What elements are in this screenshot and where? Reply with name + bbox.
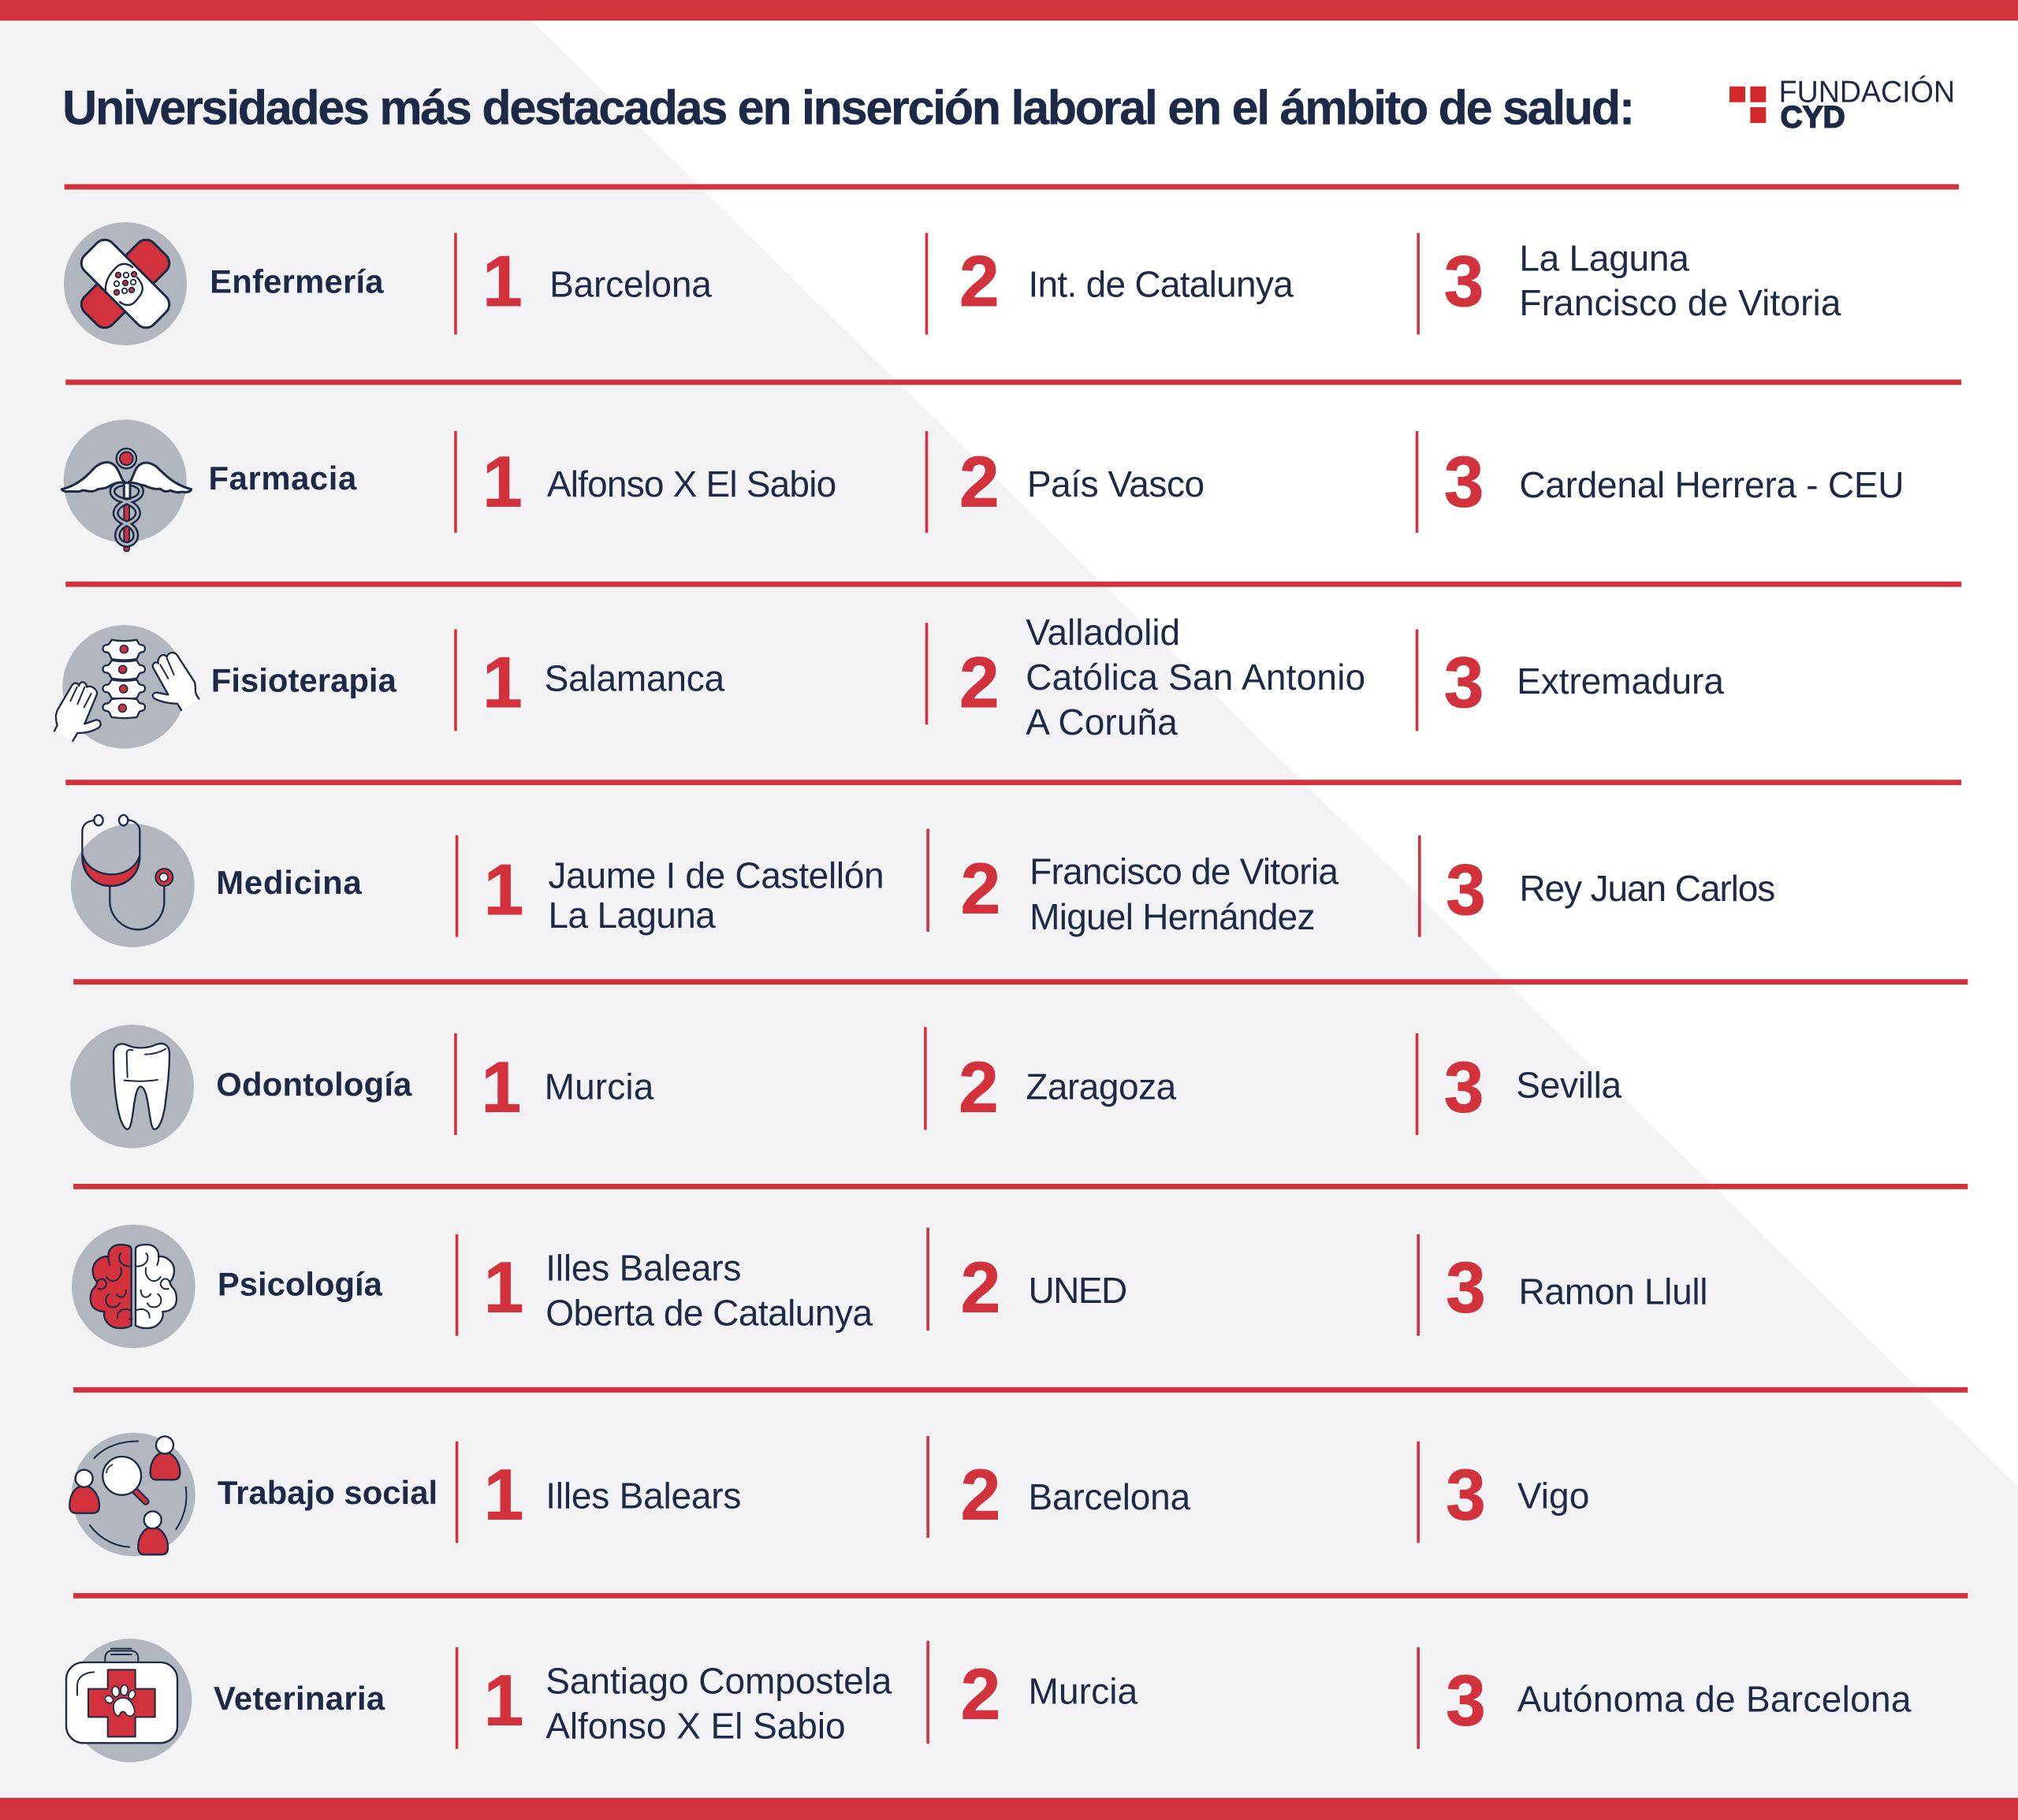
- rank 3: [1417, 431, 1904, 533]
- rank 1: 1: [482, 643, 523, 723]
- rank 2: [928, 1228, 1127, 1331]
- rank 2: [928, 828, 1339, 937]
- title: Universidades más destacadas en inserción laboral en el ámbito de salud:: [62, 81, 1635, 135]
- rank 2: 2: [961, 1455, 1000, 1535]
- rank 3: Vigo: [1517, 1475, 1589, 1516]
- top bar: [0, 0, 2018, 20]
- row: Trabajo social: [69, 1433, 1589, 1556]
- rank 2: [928, 1641, 1138, 1744]
- rank 3: 3: [1446, 1248, 1486, 1327]
- rank 2: [927, 612, 1365, 743]
- rank 2: 2: [959, 1048, 999, 1128]
- rank 2: A Coruña: [1026, 702, 1178, 743]
- rank 2: [928, 1436, 1191, 1538]
- rank 1: [456, 233, 712, 334]
- rank 2: Católica San Antonio: [1026, 657, 1365, 698]
- row: Psicología: [72, 1225, 1708, 1348]
- row: Medicina: [71, 815, 1775, 947]
- rank 2: [925, 1027, 1177, 1130]
- icon: bandages: [64, 222, 187, 345]
- rank 2: País Vasco: [1027, 463, 1204, 504]
- logo: Fundación CYD: [1729, 76, 1955, 135]
- rank 1: Murcia: [545, 1066, 654, 1107]
- rank 1: [457, 836, 884, 937]
- label: Enfermería: Enfermería: [210, 262, 384, 300]
- row: Fisioterapia: [54, 612, 1724, 749]
- label: Veterinaria: Veterinaria: [214, 1680, 385, 1717]
- rank 3: La Laguna: [1519, 238, 1689, 279]
- rank 2: Francisco de Vitoria: [1029, 851, 1339, 892]
- label: Psicología: Psicología: [218, 1265, 383, 1302]
- label: Odontología: Odontología: [216, 1066, 412, 1103]
- rank 3: 3: [1446, 1455, 1486, 1535]
- rank 1: 1: [482, 442, 523, 522]
- row: Odontología: [70, 1025, 1622, 1148]
- rank 1: 1: [484, 1248, 523, 1327]
- rank 3: [1418, 1647, 1912, 1749]
- icon: spine and hands: [54, 625, 199, 749]
- row: Veterinaria: [66, 1639, 1912, 1762]
- rank 2: 2: [959, 442, 1000, 522]
- rank 1: [456, 431, 836, 533]
- rank 1: 1: [482, 1048, 521, 1128]
- rank 3: Ramon Llull: [1519, 1271, 1708, 1312]
- rank 3: [1417, 629, 1724, 731]
- rank 1: Salamanca: [545, 658, 725, 699]
- rank 1: Jaume I de Castellón: [549, 855, 884, 896]
- rank 1: [457, 1647, 892, 1749]
- rank 1: Alfonso X El Sabio: [545, 1706, 846, 1747]
- label: Medicina: Medicina: [216, 864, 363, 901]
- rank 2: Barcelona: [1028, 1476, 1191, 1517]
- icon: people and magnifier: [69, 1433, 195, 1556]
- rank 2: 2: [961, 1654, 1000, 1734]
- rank 1: Oberta de Catalunya: [545, 1293, 873, 1334]
- icon: tooth: [70, 1025, 194, 1148]
- rank 3: [1420, 836, 1775, 937]
- label: Trabajo social: Trabajo social: [218, 1474, 437, 1511]
- rank 2: UNED: [1028, 1270, 1127, 1311]
- rank 1: Santiago Compostela: [545, 1661, 892, 1702]
- rank 3: Sevilla: [1516, 1065, 1622, 1106]
- rank 2: Valladolid: [1026, 612, 1180, 653]
- rank 2: 2: [959, 242, 1000, 322]
- rank 2: [927, 233, 1294, 334]
- rank 2: Murcia: [1028, 1671, 1138, 1712]
- rank 1: [456, 1033, 654, 1135]
- rank 2: 2: [961, 849, 1000, 929]
- rank 1: Illes Balears: [545, 1247, 741, 1288]
- rank 1: [456, 629, 725, 731]
- rank 1: 1: [482, 242, 523, 322]
- rank 3: Cardenal Herrera - CEU: [1519, 464, 1904, 505]
- rank 3: 3: [1444, 242, 1484, 322]
- rank 2: Zaragoza: [1026, 1066, 1177, 1107]
- logo: Fundación CYD: CYD: [1781, 101, 1845, 135]
- rank 1: 1: [484, 1455, 523, 1535]
- rank 3: Autónoma de Barcelona: [1517, 1678, 1912, 1719]
- rank 2: Int. de Catalunya: [1028, 263, 1294, 304]
- rank 1: 1: [484, 1662, 523, 1741]
- rank 1: Barcelona: [549, 263, 712, 304]
- rank 1: 1: [484, 850, 523, 930]
- rank 3: 3: [1444, 442, 1484, 522]
- rank 2: 2: [959, 643, 1000, 723]
- rank 3: [1417, 1033, 1622, 1135]
- rank 3: 3: [1446, 1662, 1486, 1741]
- rank 2: 2: [961, 1248, 1000, 1327]
- rank 2: Miguel Hernández: [1029, 896, 1316, 937]
- rank 3: 3: [1444, 643, 1484, 723]
- rank 3: Rey Juan Carlos: [1519, 868, 1775, 909]
- label: Farmacia: Farmacia: [208, 460, 357, 497]
- rank 1: [457, 1234, 873, 1336]
- label: Fisioterapia: Fisioterapia: [211, 662, 397, 699]
- rank 1: La Laguna: [549, 895, 716, 936]
- rank 3: 3: [1444, 1048, 1484, 1128]
- row: Enfermería: [64, 222, 1841, 345]
- rank 3: [1418, 1234, 1708, 1336]
- icon: veterinary first-aid kit: [66, 1639, 192, 1762]
- rank 3: [1418, 233, 1841, 334]
- rank 1: Illes Balears: [545, 1475, 741, 1516]
- row separators: [65, 187, 1968, 1596]
- rank 3: Francisco de Vitoria: [1519, 282, 1841, 323]
- rank 2: [927, 431, 1204, 533]
- icon: caduceus: [61, 419, 192, 551]
- row: Farmacia: [61, 419, 1904, 551]
- rank 1: Alfonso X El Sabio: [547, 463, 836, 504]
- logo: Fundación CYD: FUNDACIÓN: [1779, 76, 1955, 110]
- rank 3: Extremadura: [1517, 661, 1724, 702]
- rank 3: 3: [1446, 850, 1486, 930]
- icon: stethoscope: [71, 815, 195, 947]
- rank 1: [457, 1442, 741, 1543]
- rank 3: [1418, 1442, 1589, 1543]
- bottom bar: [0, 1798, 2018, 1820]
- icon: brain: [72, 1225, 195, 1348]
